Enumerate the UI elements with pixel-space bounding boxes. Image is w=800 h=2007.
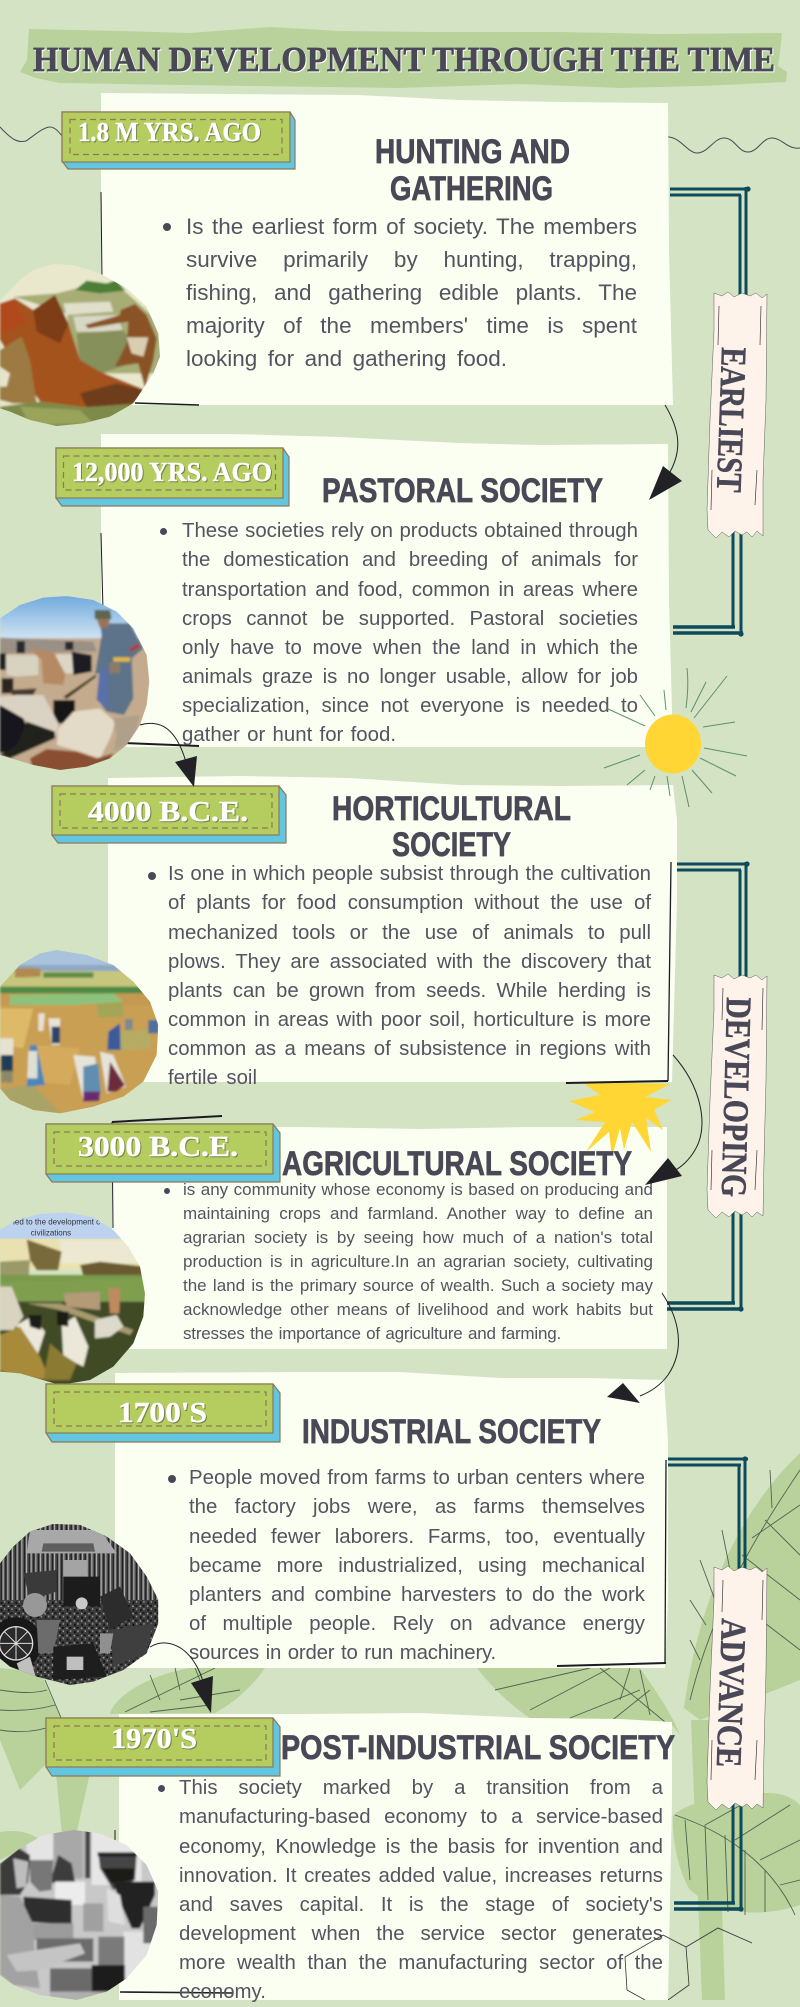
date badge: 1970s: 1970'S <box>111 1723 197 1755</box>
text block: pastoral society <box>160 520 638 746</box>
text block: industrial society: of multiple people. Rely on advance energy <box>189 1613 645 1635</box>
text block: post-industrial society: more wealth than the manufacturing sector of the <box>179 1952 663 1974</box>
bracket: earliest bottom <box>673 530 744 637</box>
heading: horticultural society: HORTICULTURAL <box>332 790 571 828</box>
date badge: 4000 BCE: 4000 B.C.E. <box>88 796 248 828</box>
text block: horticultural society: plants can be grown from seeds. While herding is <box>168 980 651 1002</box>
text block: hunting and gathering: fishing, and gathering edible plants. The <box>186 280 637 305</box>
text block: hunting and gathering <box>163 214 637 371</box>
date badge: 1.8 M yrs ago: 1.8 M YRS. AGO <box>78 117 261 147</box>
arrow: industrial to post-industrial <box>150 1643 213 1713</box>
text block: industrial society: planters and combine harvesters to do the work <box>189 1584 645 1606</box>
text block: industrial society: needed fewer laborers. Farms, too, eventually <box>189 1526 645 1548</box>
text block: pastoral society: These societies rely on products obtained through <box>182 520 638 542</box>
text block: horticultural society: common as a means of subsistence in regions with <box>168 1038 651 1060</box>
text block: hunting and gathering: majority of the members' time is spent <box>186 313 637 338</box>
panel: agricultural card <box>112 1127 667 1349</box>
text block: horticultural society: Is one in which people subsist through the cultivation <box>168 863 651 885</box>
text block: horticultural society: fertile soil <box>168 1067 257 1089</box>
text block: agricultural society: production is in agriculture.In an agrarian society, cultivating <box>183 1252 653 1271</box>
text block: agricultural society: maintaining crops and farmland. Another way to define an <box>183 1204 653 1223</box>
text block: agricultural society: the land is the primary source of wealth. Such a society may <box>183 1276 653 1295</box>
banner: developing: DEVELOPING <box>714 997 759 1198</box>
text block: industrial society: sources in order to run machinery. <box>189 1642 496 1664</box>
yellow starburst <box>569 1082 671 1157</box>
bracket: developing top <box>677 861 750 980</box>
heading: hunting and gathering: GATHERING <box>390 170 553 208</box>
panel: pastoral card <box>101 434 673 747</box>
text block: post-industrial society: This society marked by a transition from a <box>179 1777 663 1799</box>
arrow: hunting to pastoral <box>649 405 682 500</box>
text block: pastoral society: only have to move when the land in which the <box>182 637 638 659</box>
text block: horticultural society <box>148 863 652 1089</box>
date badge: 1700s: 1700'S <box>118 1397 207 1429</box>
panel: industrial card <box>115 1372 668 1668</box>
bracket: earliest top <box>670 186 751 300</box>
heading: pastoral society: PASTORAL SOCIETY <box>322 472 603 510</box>
picture: factory machinery <box>0 1520 163 1690</box>
text block: industrial society: became more industrialized, using mechanical <box>189 1555 645 1577</box>
text block: post-industrial society: manufacturing-based economy to a service-based <box>179 1806 663 1828</box>
text block: agricultural society: is any community whose economy is based on producing and <box>183 1180 653 1199</box>
text block: pastoral society: specialization, since not everyone is needed to <box>182 695 638 717</box>
text block: post-industrial society <box>158 1777 663 2003</box>
text block: pastoral society: gather or hunt for food. <box>182 724 396 746</box>
heading: agricultural society: AGRICULTURAL SOCIETY <box>282 1145 632 1183</box>
arrow: horticultural to agricultural <box>645 1055 702 1185</box>
picture: harvest field <box>0 945 163 1115</box>
panel: post-industrial card <box>119 1713 672 2000</box>
background leaf: far left <box>0 1668 90 1860</box>
picture: early farmers with caption band: civilizations <box>31 1228 71 1237</box>
sun with rays <box>604 668 747 807</box>
text block: horticultural society: of plants for food consumption without the use of <box>168 892 651 914</box>
date badge: 12,000 yrs ago: 12,000 YRS. AGO <box>72 457 272 487</box>
text block: pastoral society: animals graze is no longer usable, allow for job <box>182 666 638 688</box>
picture: early farmers with caption band <box>0 1210 150 1388</box>
picture: hunters and beast <box>0 264 160 426</box>
date badge: 1.8 M yrs ago <box>62 112 295 169</box>
date badge: 12,000 yrs ago <box>56 448 289 506</box>
panel: hunting card <box>101 93 673 405</box>
text block: post-industrial society: innovation. It creates added value, increases returns <box>179 1865 663 1887</box>
date badge: 1700s <box>46 1384 280 1442</box>
heading: horticultural society <box>332 790 571 864</box>
text block: pastoral society: crops cannot be supported. Pastoral societies <box>182 608 638 630</box>
molecule outline <box>625 1928 752 2000</box>
banner: earliest: EARLIEST <box>709 347 754 493</box>
text block: post-industrial society: economy, Knowledge is the basis for invention and <box>179 1836 663 1858</box>
picture: herder with flock <box>0 595 153 772</box>
heading: hunting and gathering: HUNTING AND <box>375 133 570 171</box>
squiggle right <box>668 137 800 153</box>
bracket: developing bottom <box>666 1210 744 1312</box>
arrow: agricultural to industrial <box>607 1293 678 1403</box>
banner: developing <box>707 974 767 1218</box>
card ink lines <box>101 192 671 1993</box>
text block: hunting and gathering: Is the earliest form of society. The members <box>186 214 637 239</box>
background leaf: lower right <box>673 1793 800 1915</box>
text block: post-industrial society: and saves capital. It is the stage of society's <box>179 1894 663 1916</box>
banner: advance: ADVANCE <box>709 1618 754 1768</box>
text block: industrial society: People moved from farms to urban centers where <box>189 1467 645 1489</box>
text block: agricultural society: stresses the importance of agriculture and farming. <box>183 1324 561 1343</box>
text block: post-industrial society: development when the service sector generates <box>179 1923 663 1945</box>
panel: horticultural card <box>108 776 677 1082</box>
text block: agricultural society: agrarian society is by seeing how much of a nation's total <box>183 1228 653 1247</box>
date badge: 4000 BCE <box>52 786 286 843</box>
heading: horticultural society: SOCIETY <box>392 826 511 864</box>
text block: horticultural society: common in areas with poor soil, horticulture is more <box>168 1009 651 1031</box>
banner: advance <box>707 1566 767 1810</box>
background leaf: left centre <box>110 1668 265 1714</box>
date badge: 1970s <box>46 1718 280 1776</box>
text block: industrial society: the factory jobs were, as farms themselves <box>189 1496 645 1518</box>
heading: industrial society: INDUSTRIAL SOCIETY <box>302 1413 601 1451</box>
picture: barista with coffee grinders <box>0 1825 163 2002</box>
text block: hunting and gathering: survive primarily by hunting, trapping, <box>186 247 637 272</box>
text block: industrial society <box>168 1467 645 1664</box>
heading: post-industrial society: POST-INDUSTRIAL SOCIETY <box>281 1729 675 1767</box>
background leaf: upper right <box>684 1453 800 2000</box>
text block: agricultural society: acknowledge other means of livelihood and work habits but <box>183 1300 653 1319</box>
text block: agricultural society <box>164 1180 653 1343</box>
title brush band <box>20 27 787 88</box>
text block: horticultural society: plows. They are associated with the discovery that <box>168 951 651 973</box>
banner: earliest <box>707 292 767 538</box>
text block: horticultural society: mechanized tools or the use of animals to pull <box>168 922 651 944</box>
text block: hunting and gathering: looking for and gathering food. <box>186 346 507 371</box>
text block: post-industrial society: economy. <box>179 1981 266 2003</box>
date badge: 3000 BCE <box>46 1124 280 1182</box>
text block: pastoral society: transportation and food, common in areas where <box>182 579 638 601</box>
squiggle left <box>0 127 64 142</box>
arrow: pastoral to horticultural <box>140 723 197 787</box>
heading: hunting and gathering <box>375 133 570 208</box>
bracket: advance bottom <box>674 1800 744 1912</box>
bracket: advance top <box>668 1456 748 1572</box>
picture: early farmers with caption band: ied to the development c <box>13 1218 100 1227</box>
text block: pastoral society: the domestication and breeding of animals for <box>182 549 638 571</box>
background leaf: centre <box>477 1668 680 1735</box>
date badge: 3000 BCE: 3000 B.C.E. <box>78 1131 238 1163</box>
